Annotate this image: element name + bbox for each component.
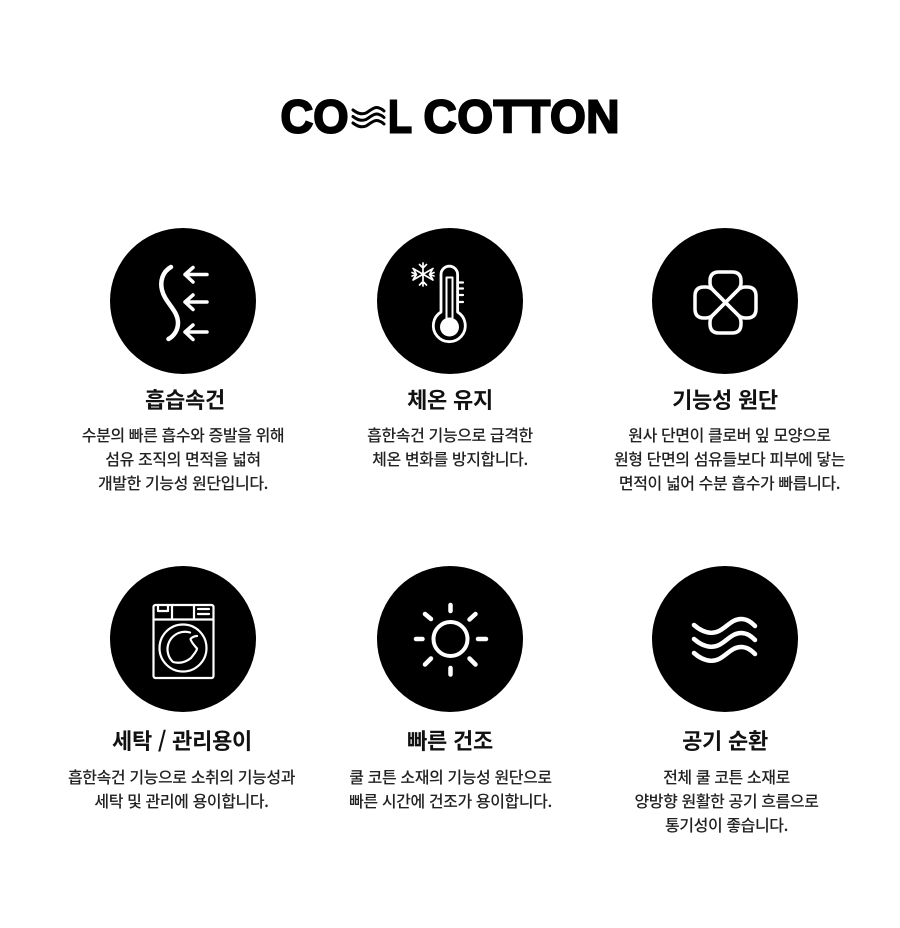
text block	[634, 764, 819, 836]
text block: 전체 쿨 코튼 소재로	[663, 764, 790, 788]
text block: 원사 단면이 클로버 잎 모양으로	[628, 422, 831, 446]
heading: 빠른 건조	[407, 724, 493, 756]
text block	[614, 422, 845, 494]
text block: 면적이 넓어 수분 흡수가 빠릅니다.	[619, 470, 840, 494]
text block: 흡한속건 기능으로 급격한	[367, 422, 533, 446]
title: COOL COTTON logo: COTTON	[424, 90, 620, 142]
heading: 체온 유지	[407, 383, 493, 415]
text block: 통기성이 좋습니다.	[665, 812, 788, 836]
icon: thermometer and snowflake	[377, 228, 523, 374]
title: COOL COTTON logo	[280, 90, 620, 142]
icon: waves	[652, 566, 798, 712]
heading: 세탁 / 관리용이	[112, 724, 252, 756]
text block	[349, 764, 552, 812]
panel: fast drying	[349, 566, 552, 812]
heading: 기능성 원단	[672, 383, 778, 415]
text block: 섬유 조직의 면적을 넓혀	[105, 446, 261, 470]
icon: curve with arrows	[110, 228, 256, 374]
text block: 개발한 기능성 원단입니다.	[98, 470, 268, 494]
panel: air circulation	[634, 566, 819, 836]
title: COOL COTTON logo: CO	[280, 90, 348, 142]
text block: 원형 단면의 섬유들보다 피부에 닿는	[614, 446, 845, 470]
text block	[82, 422, 284, 494]
text block: 양방향 원활한 공기 흐름으로	[634, 788, 819, 812]
text block	[367, 422, 533, 470]
text block: 쿨 코튼 소재의 기능성 원단으로	[349, 764, 552, 788]
heading: 공기 순환	[682, 724, 768, 756]
icon: washing machine	[110, 566, 256, 712]
text block	[68, 764, 295, 812]
text block: 체온 변화를 방지합니다.	[372, 446, 528, 470]
icon: sun	[377, 566, 523, 712]
heading: 흡습속건	[145, 383, 225, 415]
panel: functional fabric	[614, 228, 845, 494]
text block: 세탁 및 관리에 용이합니다.	[94, 788, 269, 812]
panel: body temperature	[367, 228, 533, 470]
text block: 빠른 시간에 건조가 용이합니다.	[349, 788, 552, 812]
title: COOL COTTON logo: L	[388, 90, 412, 142]
text block: 흡한속건 기능으로 소취의 기능성과	[68, 764, 295, 788]
panel: easy washing	[68, 566, 295, 812]
panel: moisture absorption	[82, 228, 284, 494]
icon: clover	[652, 228, 798, 374]
text block: 수분의 빠른 흡수와 증발을 위해	[82, 422, 284, 446]
